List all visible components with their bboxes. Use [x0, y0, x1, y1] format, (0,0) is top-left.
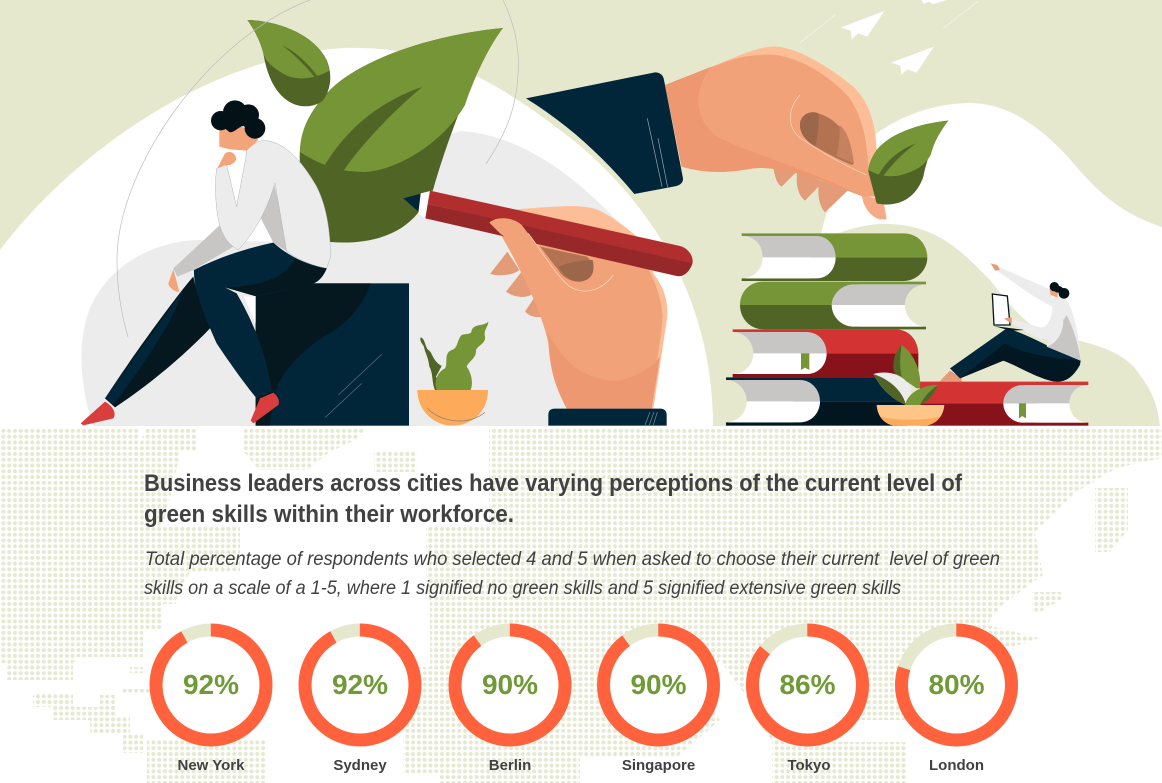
box scratch lines	[325, 354, 382, 418]
drawing hand with pen	[403, 191, 693, 426]
donut: Sydney: 92%	[332, 669, 388, 700]
hand shadow	[665, 67, 863, 197]
hand	[168, 269, 179, 292]
thumb	[489, 218, 536, 244]
sleeve lines	[647, 118, 668, 187]
donut: Berlin: 90%	[482, 669, 538, 700]
tablet	[992, 294, 1010, 325]
paper planes	[800, 0, 978, 75]
book 2 green	[740, 282, 926, 329]
hero background	[0, 0, 1162, 426]
book 5 red	[920, 382, 1088, 426]
raised arm	[997, 267, 1055, 308]
raised hand	[991, 263, 1000, 271]
donut: London	[902, 630, 1012, 774]
cuff	[548, 409, 667, 426]
grey blob	[81, 131, 648, 426]
neck and face	[219, 127, 258, 151]
chin hand	[217, 152, 236, 168]
donut: London: London	[929, 757, 984, 774]
donut: Tokyo	[752, 630, 862, 774]
donut: Tokyo: 86%	[779, 669, 836, 700]
torso and front arm	[1012, 296, 1081, 361]
small potted plant	[873, 345, 944, 426]
book 4 navy	[726, 377, 907, 426]
heading: green skills within their workforce.	[144, 501, 514, 528]
potted plant	[417, 322, 488, 426]
fingers	[490, 252, 544, 317]
torso inner	[261, 186, 286, 251]
subheading: Total percentage of respondents who selected 4 and 5 when asked to choose their current level of green	[145, 549, 1000, 570]
beige hill right	[820, 224, 1160, 426]
donut: New York: 92%	[183, 669, 239, 700]
donut: New York	[156, 630, 266, 774]
laptop base	[994, 326, 1025, 331]
white arc shape	[0, 48, 713, 426]
stack of books	[726, 233, 1088, 426]
gap	[244, 297, 256, 323]
big leaf	[300, 28, 503, 243]
heading	[144, 470, 963, 528]
legs	[950, 328, 1081, 382]
donut: Singapore: 90%	[630, 669, 687, 700]
thumb tip	[862, 195, 887, 219]
hero illustration	[0, 0, 1162, 426]
torso shadow	[1047, 315, 1081, 361]
sleeve	[526, 72, 683, 194]
palm shadow	[548, 333, 660, 408]
face	[1049, 288, 1058, 298]
pen	[403, 191, 693, 276]
donut: Tokyo: Tokyo	[787, 757, 831, 774]
subheading: skills on a scale of a 1-5, where 1 signified no green skills and 5 signified extensive green skills	[144, 578, 901, 599]
back arm	[173, 225, 233, 277]
hair	[211, 100, 265, 139]
donut: Sydney	[305, 630, 415, 774]
box shadow	[256, 283, 371, 426]
donut: New York: New York	[178, 757, 245, 774]
small person with tablet	[939, 263, 1081, 382]
thinking man on a box	[81, 100, 409, 426]
seat shadow	[225, 258, 327, 296]
back leg	[105, 277, 212, 407]
donut: Berlin: Berlin	[489, 757, 531, 774]
book 1 green	[742, 233, 927, 281]
heading: Business leaders across cities have varying perceptions of the current level of	[144, 470, 963, 497]
donut: Sydney: Sydney	[333, 757, 387, 774]
donut: Singapore	[604, 630, 714, 774]
fingers	[773, 167, 848, 212]
palm	[501, 236, 663, 408]
reaching hand holding leaf	[526, 46, 948, 219]
hand line	[528, 233, 613, 291]
hair	[1050, 282, 1069, 299]
cuff lines	[645, 412, 657, 425]
finger line	[790, 95, 867, 175]
hand rim	[665, 46, 877, 197]
leg shadow	[960, 343, 1081, 382]
white hill right	[820, 103, 1162, 426]
sweater	[215, 141, 331, 268]
small leaf	[247, 20, 330, 106]
front leg	[194, 243, 327, 398]
foot	[939, 371, 962, 382]
donut: London: 80%	[928, 669, 985, 700]
back leg highlight	[105, 290, 183, 405]
thin decorative arc	[117, 0, 310, 337]
background dotted world map	[0, 426, 1162, 783]
pen hole	[540, 247, 593, 282]
thin decorative arc right	[486, 0, 518, 164]
donut: Berlin	[455, 630, 565, 774]
hand rim	[517, 206, 667, 408]
box	[256, 283, 409, 426]
hand main	[665, 55, 877, 197]
held leaf	[868, 121, 948, 204]
finger hole	[800, 112, 854, 165]
front hand	[1004, 317, 1012, 324]
subheading	[144, 549, 1000, 599]
socks	[81, 393, 279, 425]
donut: Singapore: Singapore	[622, 757, 695, 774]
book 3 red	[733, 329, 918, 377]
